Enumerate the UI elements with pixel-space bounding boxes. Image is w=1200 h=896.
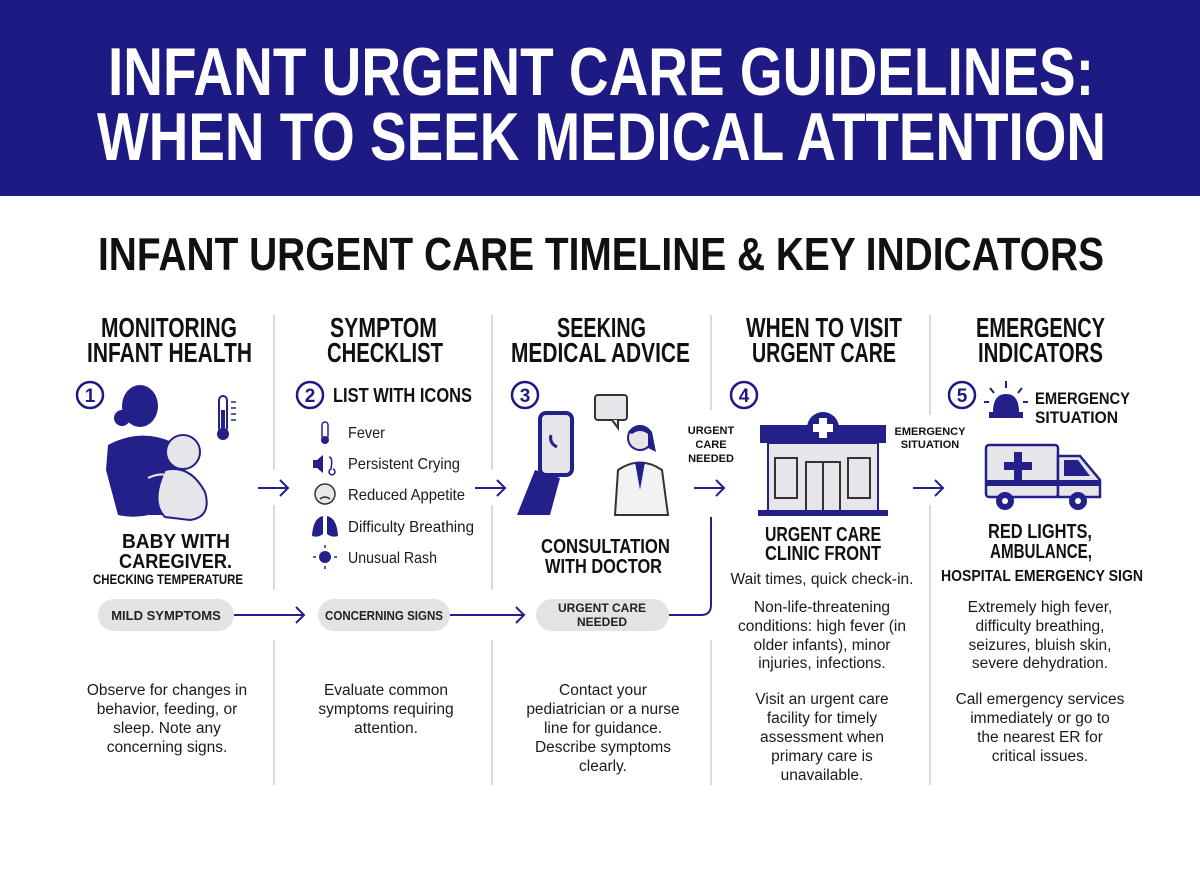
- body col5: the nearest ER for: [977, 729, 1103, 746]
- heading col1: [87, 312, 252, 368]
- caption col5: RED LIGHTS,: [988, 521, 1092, 543]
- step 3 badge: 3: [520, 386, 530, 407]
- pill: mild symptoms: MILD SYMPTOMS: [111, 608, 221, 623]
- arrows: [234, 480, 943, 623]
- body col4: unavailable.: [781, 767, 863, 784]
- symptom list: Persistent Crying: [348, 456, 460, 473]
- caption col1: CHECKING TEMPERATURE: [93, 571, 243, 587]
- symptom list: Unusual Rash: [348, 550, 437, 567]
- body col3: Contact your: [559, 682, 647, 699]
- caption col1: BABY WITH: [122, 531, 230, 553]
- pill: urgent care needed: [536, 599, 669, 631]
- body col1: sleep. Note any: [113, 720, 221, 737]
- caption col5: AMBULANCE,: [990, 541, 1092, 563]
- emergency situation label: SITUATION: [1035, 408, 1118, 427]
- panel: emergency indicators: [941, 312, 1143, 765]
- arrow label: urgent care needed: URGENT: [688, 425, 734, 437]
- title: [97, 34, 1106, 175]
- body col5: severe dehydration.: [972, 655, 1108, 672]
- body col2: attention.: [354, 720, 418, 737]
- pill: urgent care needed: NEEDED: [577, 615, 627, 629]
- panel: symptom checklist: [297, 312, 474, 737]
- body col3: line for guidance.: [544, 720, 662, 737]
- icon: ambulance: [986, 445, 1100, 510]
- arrow label: urgent care needed: CARE: [695, 439, 727, 451]
- body col5: difficulty breathing,: [976, 618, 1104, 635]
- panel: when to visit urgent care: [731, 312, 913, 784]
- symptom list: Difficulty Breathing: [348, 519, 474, 536]
- arrow label: emergency situation: [895, 426, 966, 451]
- pill: urgent care needed: URGENT CARE: [558, 601, 646, 615]
- caption col3: [541, 536, 670, 578]
- heading col3: MEDICAL ADVICE: [511, 337, 690, 368]
- header banner: [0, 0, 1200, 196]
- body col5: immediately or go to: [970, 710, 1110, 727]
- panel: monitoring infant health: [77, 312, 252, 756]
- body col4: facility for timely: [767, 710, 877, 727]
- arrow label: urgent care needed: NEEDED: [688, 453, 734, 465]
- symptom list: Fever: [348, 425, 386, 442]
- arrow label: urgent care needed: [688, 425, 734, 465]
- body col4: conditions: high fever (in: [738, 618, 906, 635]
- body col4: primary care is: [771, 748, 873, 765]
- heading col1: MONITORING: [101, 312, 237, 343]
- heading col2: [327, 312, 443, 368]
- caption col5: [941, 521, 1143, 585]
- body col4: Visit an urgent care: [755, 691, 889, 708]
- pill: concerning signs: CONCERNING SIGNS: [325, 608, 443, 623]
- heading col5: [976, 312, 1105, 368]
- icon: siren: [984, 381, 1028, 418]
- caption col4: CLINIC FRONT: [765, 543, 881, 565]
- emergency situation label: EMERGENCY: [1035, 389, 1131, 408]
- heading col3: SEEKING: [557, 312, 646, 343]
- body col1: concerning signs.: [107, 739, 227, 756]
- body col4: older infants), minor: [754, 637, 890, 654]
- step 5 badge: [949, 382, 975, 408]
- body col5: seizures, bluish skin,: [968, 637, 1112, 654]
- heading col4: WHEN TO VISIT: [746, 312, 902, 343]
- emergency situation label: [1035, 389, 1131, 427]
- panel: seeking medical advice: [511, 312, 690, 775]
- caption col3: WITH DOCTOR: [545, 556, 662, 578]
- body col3: Describe symptoms: [535, 739, 671, 756]
- caption col1: CAREGIVER.: [119, 551, 232, 573]
- step 5 badge: 5: [957, 386, 968, 407]
- body col3: pediatrician or a nurse: [526, 701, 680, 718]
- heading col4: [746, 312, 902, 368]
- heading col5: INDICATORS: [978, 337, 1103, 368]
- list heading: LIST WITH ICONS: [333, 385, 472, 407]
- caption col1: [93, 531, 243, 587]
- arrow label: emergency situation: SITUATION: [901, 439, 959, 451]
- body col4: Non-life-threatening: [754, 599, 890, 616]
- arrow label: emergency situation: EMERGENCY: [895, 426, 966, 438]
- body col1: Observe for changes in: [87, 682, 247, 699]
- heading col1: INFANT HEALTH: [87, 337, 252, 368]
- step 1 badge: 1: [85, 386, 96, 407]
- step 2 badge: 2: [305, 386, 315, 407]
- symptom list: Reduced Appetite: [348, 487, 465, 504]
- step 4 badge: 4: [739, 386, 750, 407]
- caption col3: CONSULTATION: [541, 536, 670, 558]
- body col5: Call emergency services: [956, 691, 1125, 708]
- step 2 badge: [297, 382, 323, 408]
- body col1: behavior, feeding, or: [97, 701, 237, 718]
- icon: clinic: [758, 412, 888, 516]
- icon: thermometer: [217, 396, 236, 440]
- body col2: symptoms requiring: [318, 701, 454, 718]
- step 3 badge: [512, 382, 538, 408]
- body col5: critical issues.: [992, 748, 1088, 765]
- body col4: assessment when: [760, 729, 884, 746]
- pill: mild symptoms: [98, 599, 234, 631]
- pill: concerning signs: [318, 599, 450, 631]
- body col5: Extremely high fever,: [968, 599, 1112, 616]
- body col3: clearly.: [579, 758, 627, 775]
- heading col5: EMERGENCY: [976, 312, 1105, 343]
- caption col4: URGENT CARE: [765, 524, 881, 546]
- step 1 badge: [77, 382, 103, 408]
- heading col3: [511, 312, 690, 368]
- heading col2: CHECKLIST: [327, 337, 443, 368]
- caption col4: [765, 524, 881, 565]
- body col4: Wait times, quick check-in.: [731, 571, 913, 588]
- caption col5: HOSPITAL EMERGENCY SIGN: [941, 568, 1143, 585]
- icon: phone and doctor: [517, 395, 668, 515]
- body col4: injuries, infections.: [758, 655, 886, 672]
- body col2: Evaluate common: [324, 682, 448, 699]
- heading col2: SYMPTOM: [330, 312, 437, 343]
- heading col4: URGENT CARE: [752, 337, 896, 368]
- step 4 badge: [731, 382, 757, 408]
- icon: mother holding baby: [106, 385, 236, 520]
- symptom list: [312, 422, 474, 569]
